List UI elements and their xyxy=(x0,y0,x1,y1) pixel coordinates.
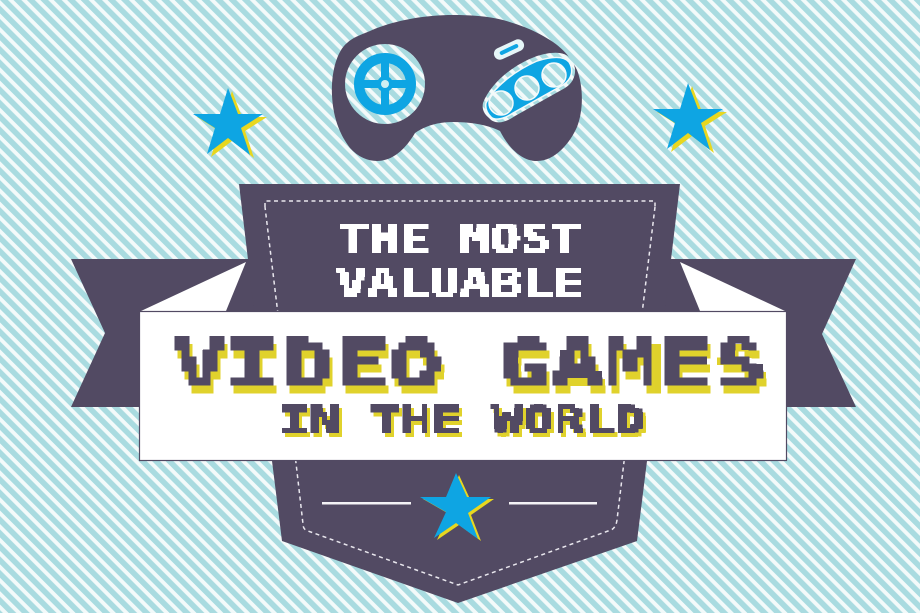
right divider line xyxy=(509,502,597,504)
yellow shadow: VIDEO GAMES xyxy=(175,336,769,410)
icon: right star xyxy=(653,83,727,153)
left ribbon tail xyxy=(71,259,270,407)
right ribbon fold xyxy=(680,262,785,311)
yellow shadow: IN THE WORLD xyxy=(282,404,648,445)
title line: the most: THE MOST xyxy=(339,217,581,261)
dark lettering: IN THE WORLD xyxy=(279,400,645,441)
icon: left star xyxy=(193,88,267,158)
icon: center star xyxy=(420,473,494,541)
left ribbon fold xyxy=(141,262,246,311)
title line: valuable: VALUABLE xyxy=(336,261,584,305)
right ribbon tail xyxy=(650,259,856,407)
dark lettering: VIDEO GAMES xyxy=(172,328,766,402)
icon: start button xyxy=(492,37,526,62)
left divider line xyxy=(322,502,411,504)
icon: action buttons xyxy=(483,53,575,122)
banner title: video games xyxy=(172,328,769,410)
title: the most valuable xyxy=(336,217,584,305)
white banner xyxy=(140,312,786,460)
icon: directional pad xyxy=(345,44,425,124)
stitching xyxy=(265,201,655,585)
icon: game controller xyxy=(332,15,582,161)
shield panel xyxy=(239,184,680,603)
banner subtitle: in the world xyxy=(279,400,648,445)
